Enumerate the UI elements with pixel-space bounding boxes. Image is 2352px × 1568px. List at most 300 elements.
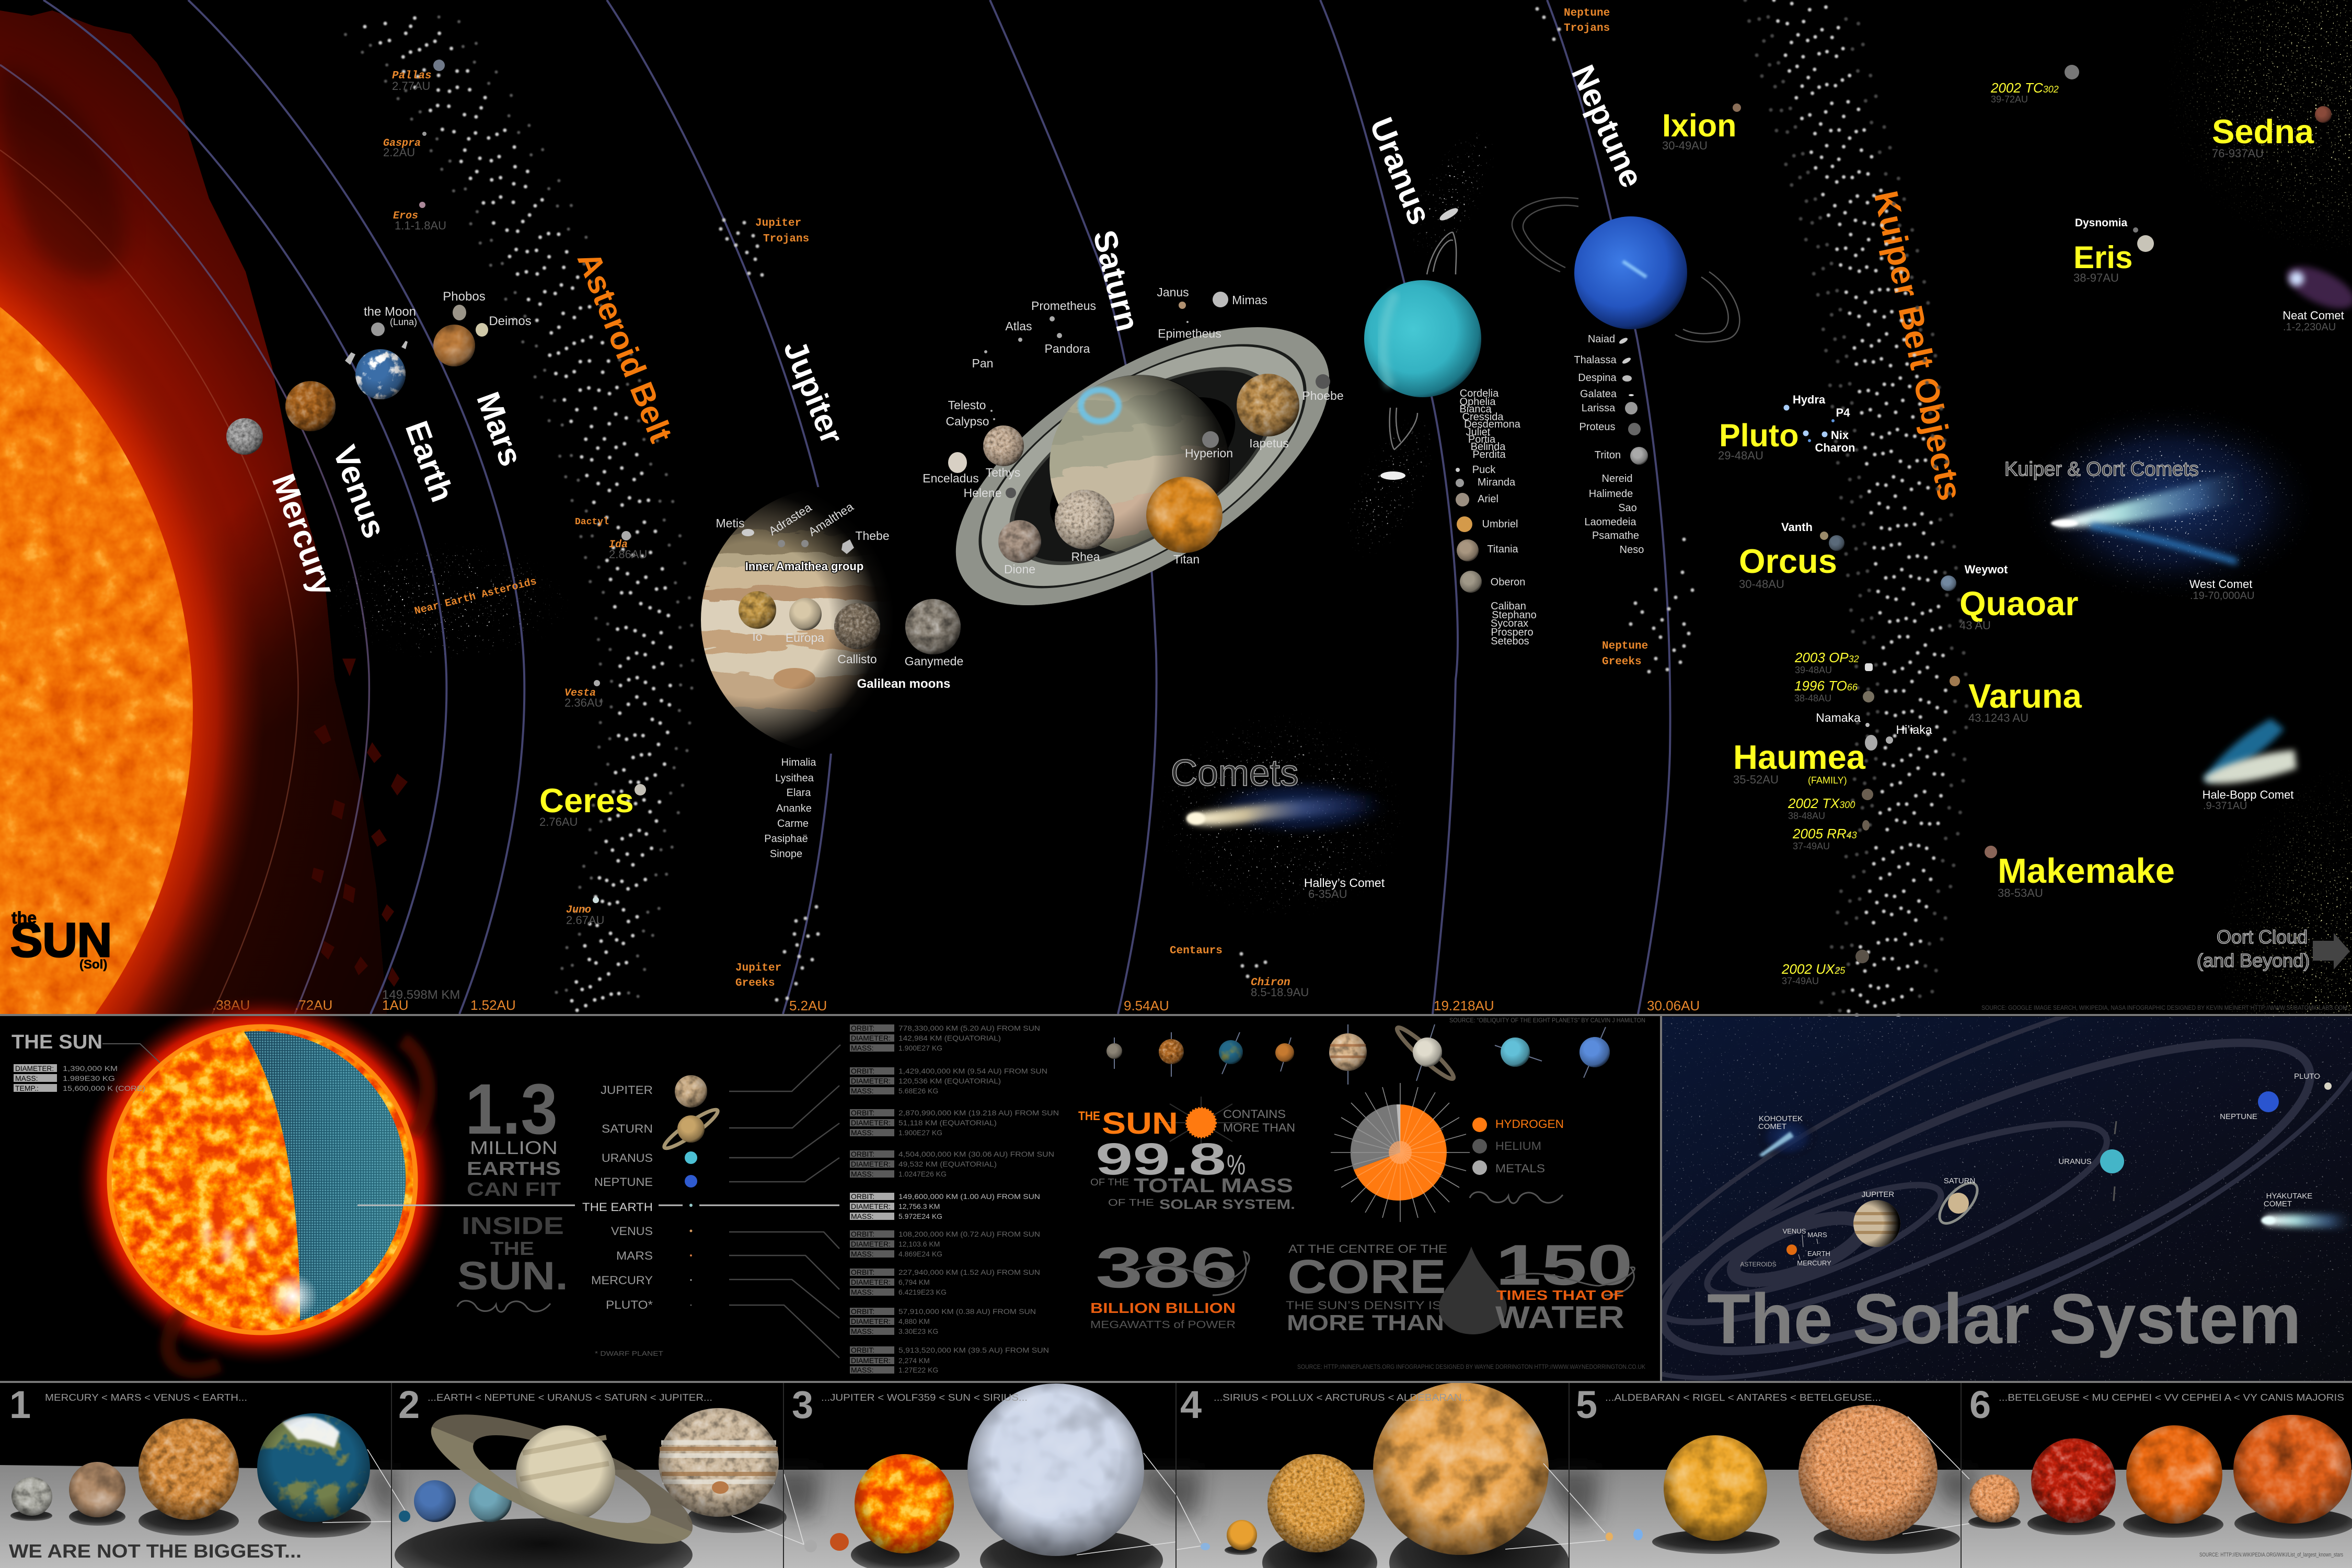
saturn moon labels: Janus: [1157, 285, 1189, 299]
uranus moon labels: Ariel: [1478, 493, 1498, 505]
asteroid labels: Eros: [393, 210, 418, 222]
step captions: ...EARTH < NEPTUNE < URANUS < SATURN < JUPITER...: [428, 1392, 712, 1403]
planet size list: [582, 1075, 721, 1357]
uranus moon labels: Sycorax: [1491, 618, 1528, 629]
venus row: DIAMETER:: [851, 1240, 891, 1248]
386 billion billion megawatts: MEGAWATTS of POWER: [1090, 1319, 1236, 1331]
saturn moon labels: [923, 285, 1344, 576]
varuna: Varuna: [1968, 677, 2082, 715]
overview planets: [1786, 1082, 2332, 1255]
pie chart legend: HYDROGEN: [1495, 1117, 1564, 1131]
kuiper and oort comets: west comet: .19-70,000AU: [2190, 590, 2254, 602]
overview labels: EARTH: [1807, 1250, 1830, 1258]
venus row: 12,103.6 KM: [898, 1240, 940, 1248]
obliquity of the planets row: SOURCE: “OBLIQUITY OF THE EIGHT PLANETS” BY CALVIN J HAMILTON: [1449, 1017, 1645, 1024]
irregular jupiter moons: [764, 757, 816, 860]
ixion: Ixion: [1662, 108, 1736, 143]
AU distance labels: 1AU: [382, 997, 409, 1013]
neptune globe: [1574, 216, 1687, 329]
orcus: 30-48AU: [1739, 578, 1784, 591]
earth row: DIAMETER:: [851, 1202, 891, 1210]
jupiter system: Inner Amalthea group: [745, 560, 863, 573]
saturn moon labels: Rhea: [1071, 550, 1100, 563]
earth row: 5.972E24 KG: [898, 1212, 942, 1220]
neptune moon labels: Naiad: [1588, 333, 1615, 345]
panel: the sun facts: [0, 994, 1661, 1382]
uranus moon labels: Miranda: [1478, 477, 1516, 488]
asteroid labels: 1.1-1.8AU: [395, 219, 446, 232]
comets feature: 6-35AU: [1308, 887, 1347, 901]
1.3 million earths statement: 1.3: [465, 1069, 558, 1149]
heading: the sun: DIAMETER:: [15, 1064, 54, 1073]
sedna: [2212, 106, 2332, 160]
size panel 5: red giants: [1606, 1405, 1938, 1541]
saturn row: ORBIT:: [851, 1067, 874, 1075]
overview labels: COMET: [1758, 1122, 1786, 1131]
planet name: Saturn: Saturn: [1086, 226, 1146, 335]
asteroid labels: 2.36AU: [564, 696, 603, 709]
minor named objects: 1996 TO66: [1794, 678, 1858, 694]
core density statement: TIMES THAT OF: [1496, 1287, 1624, 1303]
overview title: The Solar System: [1707, 1279, 2301, 1358]
99.8 percent statement: OF THE: [1090, 1177, 1129, 1187]
step captions: [45, 1392, 2344, 1403]
mars and moons: Deimos: [489, 314, 532, 328]
mars row: 6.4219E23 KG: [898, 1288, 947, 1296]
asteroid labels: 2.77AU: [392, 79, 430, 93]
pluto row: DIAMETER:: [851, 1356, 891, 1365]
jupiter row: DIAMETER:: [851, 1034, 891, 1042]
earth row: ORBIT:: [851, 1192, 874, 1201]
jupiter trojans and greeks: 8.5-18.9AU: [1251, 986, 1309, 999]
saturn moon labels: Pan: [972, 356, 993, 370]
eris: [2073, 217, 2154, 284]
uranus moon labels: Prospero: [1491, 627, 1534, 638]
pluto row: MASS:: [851, 1366, 874, 1374]
pie chart legend: [1470, 1117, 1564, 1203]
core density statement: CORE: [1287, 1250, 1446, 1304]
hale-bopp comet: .9-371AU: [2203, 800, 2247, 812]
neptune moon labels: Halimede: [1589, 488, 1633, 500]
minor named objects: 39-48AU: [1795, 665, 1832, 675]
asteroid labels: Vesta: [564, 687, 596, 699]
saturn row: 5.68E26 KG: [898, 1087, 938, 1095]
neat comet: Neat Comet: [2282, 309, 2344, 322]
pie chart legend: METALS: [1495, 1162, 1545, 1175]
cutaway sun: [77, 994, 448, 1370]
the sun label: (Sol): [79, 958, 107, 972]
haumea: Haumea: [1733, 738, 1866, 776]
jupiter row: 142,984 KM (EQUATORIAL): [898, 1034, 1001, 1042]
asteroid labels: Juno: [566, 904, 591, 916]
neptune row: 49,532 KM (EQUATORIAL): [898, 1160, 997, 1168]
mercury row: MASS:: [851, 1327, 874, 1335]
jupiter system: Metis: [716, 516, 744, 530]
neptune row: ORBIT:: [851, 1150, 874, 1158]
step numbers: 6: [1969, 1383, 1991, 1426]
neptune moon labels: Thalassa: [1574, 354, 1617, 366]
uranus moon labels: Bianca: [1459, 403, 1492, 415]
uranus globe: [1364, 280, 1481, 397]
uranus moon labels: Oberon: [1491, 577, 1525, 588]
irregular jupiter moons: Sinope: [770, 848, 802, 860]
galilean moons: Europa: [786, 631, 824, 644]
overview labels: MARS: [1807, 1231, 1827, 1239]
orcus: Orcus: [1739, 542, 1837, 580]
99.8 percent statement: 99.8: [1096, 1134, 1226, 1184]
kuiper and oort comets: west comet: [2004, 402, 2321, 602]
floor side shading: [366, 1470, 1976, 1521]
AU distance labels: 149.598M KM: [382, 988, 460, 1002]
saturn moon labels: Phoebe: [1302, 389, 1344, 402]
quaoar: 43 AU: [1959, 619, 1991, 632]
core density statement: 150: [1495, 1233, 1633, 1297]
mercury row: 3.30E23 KG: [898, 1327, 938, 1335]
neptune moon labels: Galatea: [1580, 388, 1617, 400]
uranus moon labels: Desdemona: [1464, 419, 1521, 430]
AU distance labels: 5.2AU: [789, 998, 827, 1013]
overview labels: SATURN: [1944, 1177, 1975, 1185]
planet size list: PLUTO*: [606, 1298, 653, 1311]
neptune moon labels: Nereid: [1602, 473, 1632, 485]
Ceres label: 2.76AU: [539, 815, 578, 828]
minor named objects: [1781, 65, 2079, 986]
jupiter row: MASS:: [851, 1044, 874, 1052]
uranus moon labels: Juliet: [1466, 426, 1491, 438]
mercury row: DIAMETER:: [851, 1317, 891, 1325]
asteroid labels: Ida: [609, 539, 628, 551]
pluto row: [851, 1346, 1049, 1374]
99.8 percent statement: [1078, 1097, 1295, 1212]
saturn moon labels: Enceladus: [923, 471, 979, 485]
mercury row: ORBIT:: [851, 1307, 874, 1316]
obliquity of the planets row: [1106, 1017, 1645, 1085]
venus row: 4.869E24 KG: [898, 1250, 942, 1258]
minor named objects: 2002 TX300: [1788, 795, 1855, 811]
neptune row: [851, 1150, 1054, 1178]
uranus moon labels: Puck: [1472, 464, 1496, 476]
uranus row: 1.900E27 KG: [898, 1128, 942, 1137]
panel: the solar system overview: [1564, 896, 2352, 1456]
saturn moon labels: Epimetheus: [1158, 327, 1221, 340]
AU distance labels: 30.06AU: [1647, 998, 1700, 1013]
asteroid labels: Dactyl: [575, 517, 609, 527]
pluto row: 1.27E22 KG: [898, 1366, 938, 1374]
uranus moon labels: Umbriel: [1482, 518, 1518, 530]
heading: asteroid belt: Asteroid Belt: [570, 247, 679, 447]
varuna: [1950, 676, 2082, 724]
planet size list: JUPITER: [601, 1083, 653, 1097]
minor named objects: 2003 OP32: [1794, 650, 1859, 665]
saturn moon labels: Tethys: [986, 466, 1020, 479]
99.8 percent statement: MORE THAN: [1223, 1121, 1295, 1134]
1.3 million earths statement: [457, 1069, 568, 1312]
overview comets: [1756, 1113, 2352, 1229]
pluto: P4: [1836, 406, 1850, 419]
mars row: 227,940,000 KM (1.52 AU) FROM SUN: [898, 1268, 1040, 1276]
99.8 percent statement: SOLAR SYSTEM.: [1159, 1196, 1295, 1212]
sedna: 76-937AU: [2212, 147, 2264, 160]
neptune moon labels: Triton: [1595, 449, 1621, 461]
irregular jupiter moons: Himalia: [781, 757, 816, 768]
uranus moon labels: Titania: [1487, 544, 1519, 555]
jupiter trojans and greeks: Centaurs: [1170, 945, 1223, 957]
AU distance labels: [212, 988, 1700, 1013]
step numbers: 3: [792, 1383, 813, 1426]
mars and moons: Phobos: [443, 290, 486, 304]
panel: size comparison row: [0, 1382, 2352, 1568]
haumea: 35-52AU: [1733, 773, 1779, 786]
overview orbits: [1564, 896, 2352, 1456]
99.8 percent statement: %: [1227, 1149, 1246, 1181]
386 billion billion megawatts: [1090, 1236, 1249, 1331]
mars and moons: [433, 290, 532, 366]
uranus moon labels: Perdita: [1472, 449, 1506, 460]
the Sun disc: [0, 191, 193, 1230]
overview labels: URANUS: [2058, 1157, 2092, 1166]
jupiter system: Amalthea: [806, 500, 856, 539]
overview star field: [1662, 1017, 2352, 1381]
planet size list: * DWARF PLANET: [595, 1350, 663, 1357]
makemake: Makemake: [1998, 851, 2175, 891]
pie chart legend: HELIUM: [1495, 1139, 1541, 1152]
saturn row: [851, 1067, 1047, 1095]
uranus moon labels: [1459, 388, 1537, 647]
mars row: [851, 1268, 1040, 1296]
jupiter trojans and greeks: Jupiter: [755, 217, 801, 229]
uranus moon labels: Caliban: [1491, 601, 1526, 612]
jupiter row: ORBIT:: [851, 1024, 874, 1032]
pluto row: 2,274 KM: [898, 1356, 930, 1365]
hale-bopp comet: [2203, 719, 2297, 812]
haumea: Hi’iaka: [1896, 723, 1932, 736]
quaoar: Quaoar: [1959, 584, 2079, 622]
uranus moon labels: Ophelia: [1460, 396, 1496, 408]
uranus moon labels: Cordelia: [1460, 388, 1499, 399]
planet name: Uranus: Uranus: [1363, 112, 1438, 229]
size panel 6: largest stars: [1969, 1415, 2351, 1524]
neptune moon labels: Proteus: [1579, 421, 1615, 433]
mercury row: 57,910,000 KM (0.38 AU) FROM SUN: [898, 1307, 1036, 1316]
varuna: 43.1243 AU: [1968, 711, 2028, 724]
connector lines: [729, 1045, 840, 1358]
neptune moon labels: Larissa: [1582, 402, 1616, 414]
minor named objects: 37-49AU: [1793, 841, 1830, 851]
mercury row: [851, 1307, 1036, 1335]
saturn row: MASS:: [851, 1087, 874, 1095]
planet size list: MERCURY: [591, 1274, 653, 1287]
overview labels: ASTEROIDS: [1740, 1261, 1777, 1268]
mars row: 6,794 KM: [898, 1278, 930, 1286]
jupiter trojans and greeks: Neptune: [1564, 7, 1610, 19]
pluto: [1718, 393, 1855, 462]
earth row: [851, 1192, 1040, 1220]
saturn moon labels: Telesto: [948, 398, 986, 412]
galilean moons: Ganymede: [905, 654, 963, 668]
heading: the sun: THE SUN: [11, 1031, 102, 1053]
jupiter trojans and greeks: Greeks: [1602, 656, 1642, 668]
saturn moon labels: Prometheus: [1031, 299, 1096, 313]
mercury: [226, 418, 263, 455]
venus row: 108,200,000 KM (0.72 AU) FROM SUN: [898, 1230, 1040, 1238]
earth row: MASS:: [851, 1212, 874, 1220]
core density statement: WATER: [1495, 1300, 1624, 1335]
overview labels: HYAKUTAKE: [2266, 1192, 2312, 1201]
step numbers: 5: [1576, 1383, 1597, 1426]
Ceres label: Ceres: [539, 781, 634, 820]
size panel 3: sun and sirius: [804, 1383, 1144, 1556]
uranus moon labels: Stephano: [1492, 609, 1537, 621]
386 billion billion megawatts: BILLION BILLION: [1090, 1300, 1236, 1316]
heading: the sun: MASS:: [15, 1074, 38, 1082]
scale connector lines: [322, 1416, 1969, 1555]
minor named objects: 39-72AU: [1991, 94, 2028, 105]
step numbers: [9, 1383, 1991, 1426]
neptune moon labels: Psamathe: [1592, 530, 1639, 541]
heading: kuiper belt: Kuiper Belt Objects: [1867, 188, 1969, 504]
sun panel source: SOURCE: HTTP://NINEPLANETS.ORG INFOGRAPHIC DESIGNED BY WAYNE DORRINGTON HTTP://WWW.WAYNEDORRINGTON.CO.UK: [1297, 1363, 1645, 1370]
floor: [0, 1465, 2352, 1568]
makemake: [1985, 846, 2175, 900]
planet size list: URANUS: [602, 1151, 653, 1165]
uranus row: MASS:: [851, 1128, 874, 1137]
saturn moon labels: Helene: [964, 486, 1001, 500]
orcus: Vanth: [1781, 521, 1813, 534]
99.8 percent statement: CONTAINS: [1223, 1108, 1286, 1121]
ixion: [1662, 103, 1741, 152]
near earth asteroids: [329, 541, 570, 661]
neptune row: 1.0247E26 KG: [898, 1170, 947, 1178]
jupiter row: [851, 1024, 1040, 1052]
neat comet: [2281, 258, 2352, 333]
minor named objects: 38-48AU: [1788, 811, 1825, 821]
99.8 percent statement: THE: [1078, 1109, 1100, 1123]
step numbers: 1: [9, 1383, 31, 1426]
earth row: 12,756.3 KM: [898, 1202, 940, 1210]
core density statement: [1286, 1233, 1635, 1335]
asteroid labels: 2.86AU: [609, 548, 647, 561]
neptune moon labels: Laomedeia: [1585, 516, 1636, 528]
386 billion billion megawatts: 386: [1096, 1236, 1238, 1300]
jupiter system: Thebe: [855, 529, 890, 543]
step numbers: 2: [398, 1383, 420, 1426]
AU distance labels: 9.54AU: [1124, 998, 1169, 1013]
saturn moon labels: Iapetus: [1249, 436, 1289, 450]
ixion: 30-49AU: [1662, 139, 1708, 152]
planet data table: [850, 1024, 1059, 1374]
minor named objects: 2002 UX25: [1781, 961, 1846, 977]
saturn rings front: [974, 361, 1359, 649]
heading: the sun: 1,390,000 KM: [63, 1064, 118, 1073]
uranus row: 2,870,990,000 KM (19.218 AU) FROM SUN: [898, 1109, 1059, 1117]
eris: 38-97AU: [2073, 271, 2119, 284]
eris: Dysnomia: [2075, 217, 2127, 229]
jupiter: [701, 487, 883, 754]
minor named objects: 37-49AU: [1782, 976, 1819, 986]
eris: Eris: [2073, 240, 2132, 275]
saturn moon labels: Titan: [1173, 552, 1200, 566]
jupiter trojans and greeks: Chiron: [1251, 977, 1290, 989]
saturn system: [924, 288, 1343, 605]
jupiter trojans and greeks: Trojans: [1564, 22, 1610, 34]
saturn row: DIAMETER:: [851, 1077, 891, 1085]
planet name: Mars: Mars: [469, 387, 529, 471]
saturn moon labels: Hyperion: [1185, 446, 1233, 460]
jupiter trojans and greeks: Trojans: [763, 233, 809, 245]
panel frame lines: [0, 1015, 2352, 1382]
oort cloud label and arrow: [2197, 926, 2350, 971]
overview labels: VENUS: [1783, 1227, 1806, 1235]
uranus row: ORBIT:: [851, 1109, 874, 1117]
galilean moons: [739, 591, 963, 691]
irregular jupiter moons: Ananke: [776, 803, 812, 814]
planet size list: VENUS: [611, 1225, 653, 1238]
AU distance labels: .72AU: [295, 997, 332, 1013]
neptune row: DIAMETER:: [851, 1160, 891, 1168]
makemake: 38-53AU: [1998, 886, 2043, 900]
galilean moons: Galilean moons: [857, 677, 950, 691]
1.3 million earths statement: MILLION: [470, 1138, 558, 1158]
saturn rings back: [926, 284, 1359, 649]
kuiper and oort comets: west comet: West Comet: [2189, 578, 2252, 591]
sedna: Sedna: [2212, 112, 2314, 151]
size panel 4: orange giants: [1201, 1382, 1549, 1555]
orbit lines: [0, 0, 1670, 1014]
saturn moon labels: Mimas: [1232, 293, 1267, 307]
uranus moon labels: Portia: [1468, 434, 1496, 445]
pluto: Hydra: [1793, 393, 1826, 406]
jupiter row: 778,330,000 KM (5.20 AU) FROM SUN: [898, 1024, 1040, 1032]
saturn moon labels: Atlas: [1005, 319, 1032, 333]
oort cloud label and arrow: (and Beyond): [2197, 950, 2310, 971]
haumea: (FAMILY): [1808, 775, 1847, 786]
saturn globe: [1035, 366, 1249, 559]
irregular jupiter moons: Lysithea: [775, 773, 814, 784]
neptune moons: [1618, 337, 1648, 465]
planet size list: MARS: [616, 1249, 653, 1262]
quaoar: Weywot: [1965, 563, 2008, 576]
step captions: ...BETELGEUSE < MU CEPHEI < VV CEPHEI A < VY CANIS MAJORIS: [1999, 1392, 2344, 1403]
neat comet: .1-2,230AU: [2283, 321, 2336, 333]
size panel 1: terrestrial planets: [11, 1413, 370, 1522]
jupiter trojans and greeks: Greeks: [735, 977, 775, 989]
pluto row: ORBIT:: [851, 1346, 874, 1354]
comets feature: [1155, 711, 1406, 920]
overview labels: KOHOUTEK: [1759, 1114, 1803, 1123]
quaoar: [1941, 563, 2079, 632]
neptune row: MASS:: [851, 1170, 874, 1178]
neptune row: 4,504,000,000 KM (30.06 AU) FROM SUN: [898, 1150, 1054, 1158]
earth marker line: [358, 1204, 839, 1206]
venus row: [851, 1230, 1040, 1258]
asteroid labels: 2.2AU: [383, 146, 415, 159]
1.3 million earths statement: EARTHS: [467, 1158, 561, 1179]
asteroid labels: 2.67AU: [566, 914, 604, 927]
comets feature: Comets: [1171, 753, 1299, 794]
asteroid labels: [383, 60, 647, 927]
minor named objects: 2002 TC302: [1990, 80, 2059, 96]
jupiter trojans and greeks: Neptune: [1602, 640, 1648, 652]
haumea: [1733, 711, 1932, 786]
uranus moon labels: Belinda: [1471, 441, 1506, 453]
kuiper and oort comets: west comet: Kuiper & Oort Comets: [2004, 458, 2199, 480]
size panel 2: gas giants: [399, 1403, 779, 1555]
hale-bopp comet: Hale-Bopp Comet: [2203, 788, 2293, 801]
panel dividers: [391, 1383, 1961, 1568]
oort cloud star field: [2164, 0, 2352, 1181]
step captions: ...SIRIUS < POLLUX < ARCTURUS < ALDEBARAN...: [1214, 1392, 1471, 1403]
saturn moons: [948, 292, 1330, 563]
